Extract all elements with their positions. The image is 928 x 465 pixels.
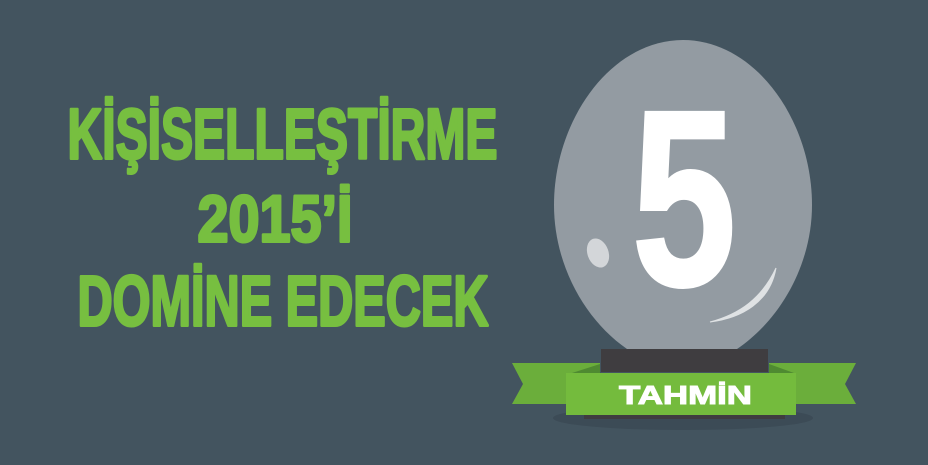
numeral 5: 5 bbox=[632, 59, 736, 339]
ribbon left tail bbox=[512, 363, 600, 404]
title bbox=[68, 96, 497, 342]
ground shadow bbox=[553, 406, 813, 430]
ribbon right tail bbox=[769, 363, 856, 404]
badge: prediction globe with ribbon bbox=[512, 40, 856, 430]
ribbon label: TAHMİN bbox=[619, 380, 752, 410]
band under-shadow bbox=[584, 415, 785, 419]
globe highlight arc bbox=[710, 268, 776, 322]
ribbon right fold bbox=[769, 364, 794, 373]
globe stand bbox=[601, 349, 768, 372]
globe bbox=[554, 40, 812, 349]
ribbon front band bbox=[566, 373, 796, 415]
title line 1: KİŞİSELLEŞTİRME bbox=[68, 96, 497, 174]
title line 3: DOMİNE EDECEK bbox=[78, 262, 488, 342]
title line 2: 2015’İ bbox=[198, 182, 352, 256]
ribbon left fold bbox=[572, 364, 600, 373]
globe highlight dot bbox=[583, 235, 613, 271]
